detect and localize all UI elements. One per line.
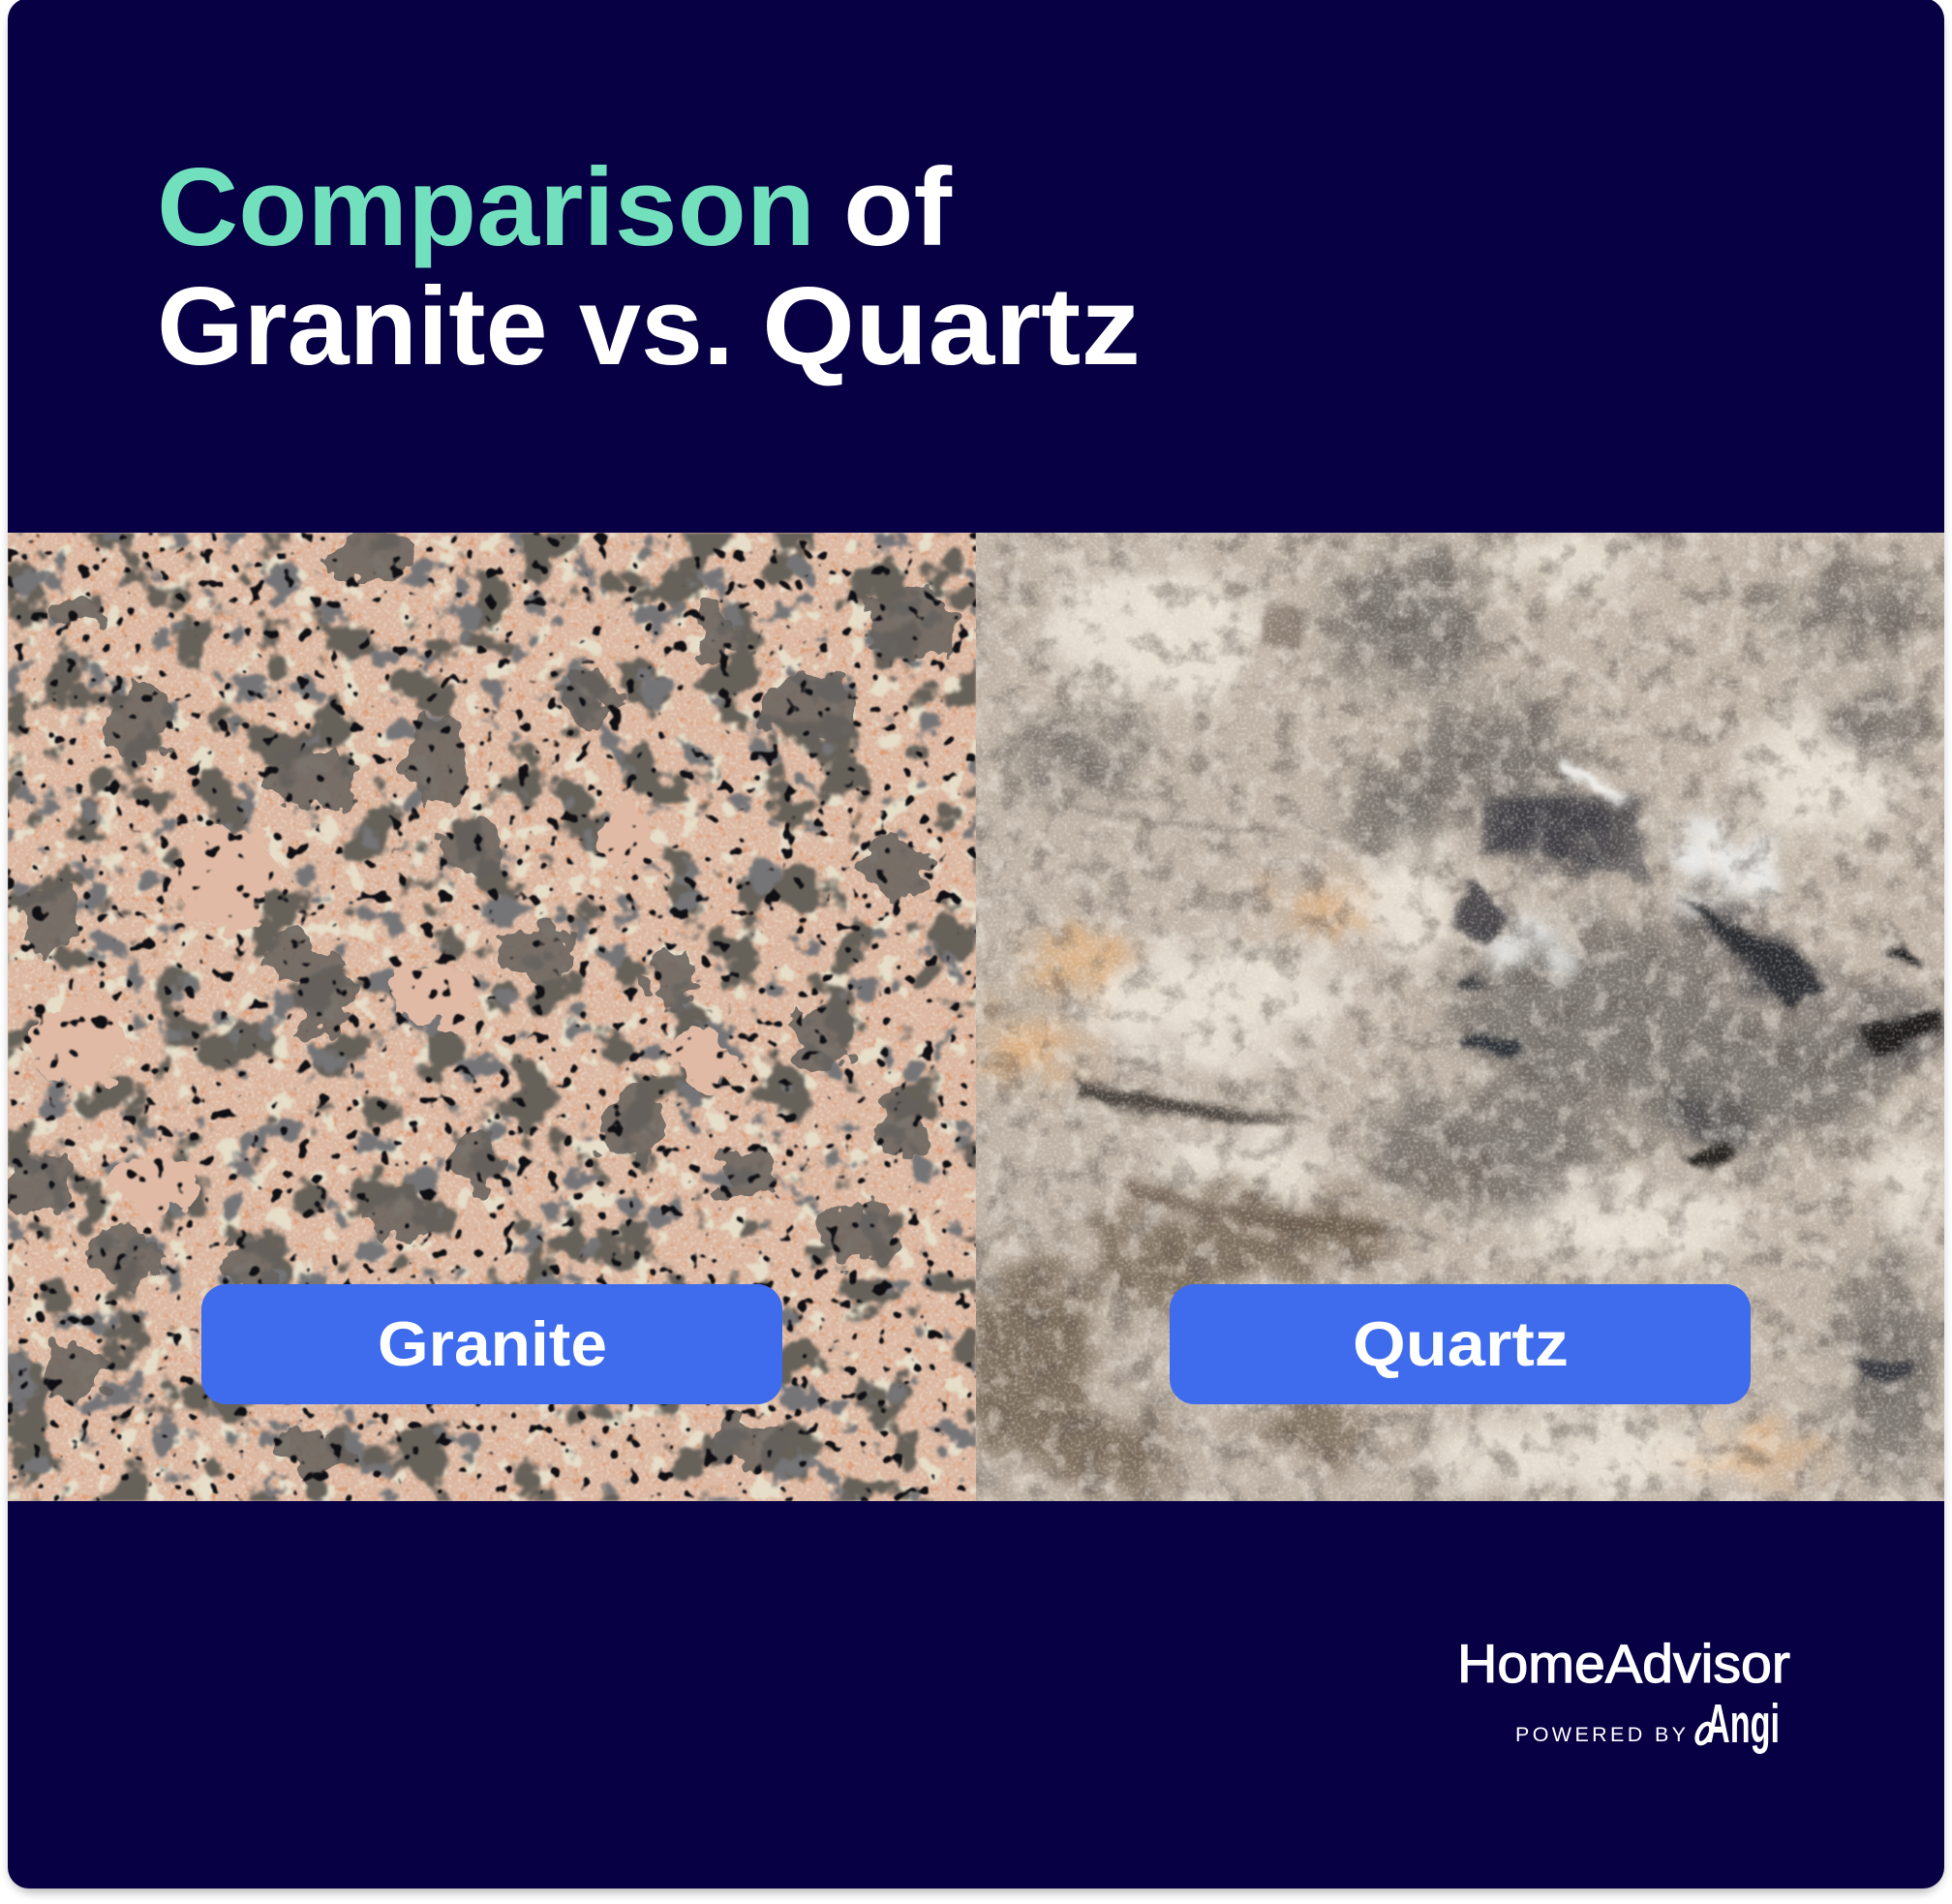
title line 1: Comparison bbox=[157, 146, 815, 269]
title line 2 bbox=[157, 265, 1141, 388]
Angi wordmark: Angi bbox=[1706, 1693, 1780, 1755]
title line 2: Granite vs. bbox=[157, 265, 734, 388]
badge: Granite bbox=[201, 1284, 782, 1404]
logo wordmark: HomeAdvisor bbox=[1457, 1633, 1790, 1694]
title bbox=[157, 146, 1141, 388]
logo: HomeAdvisor powered by Angi bbox=[1457, 1633, 1790, 1755]
title line 1: of bbox=[843, 146, 953, 269]
title line 2: Quartz bbox=[762, 265, 1141, 388]
badge: Quartz bbox=[1170, 1284, 1751, 1404]
Angi swash bbox=[1694, 1721, 1714, 1746]
badge: Granite: Granite bbox=[378, 1308, 607, 1379]
panel: quartz texture bbox=[962, 533, 1947, 1501]
powered by label: POWERED BY bbox=[1515, 1723, 1686, 1746]
badge: Quartz: Quartz bbox=[1353, 1308, 1569, 1379]
panel: granite texture bbox=[8, 533, 976, 1501]
